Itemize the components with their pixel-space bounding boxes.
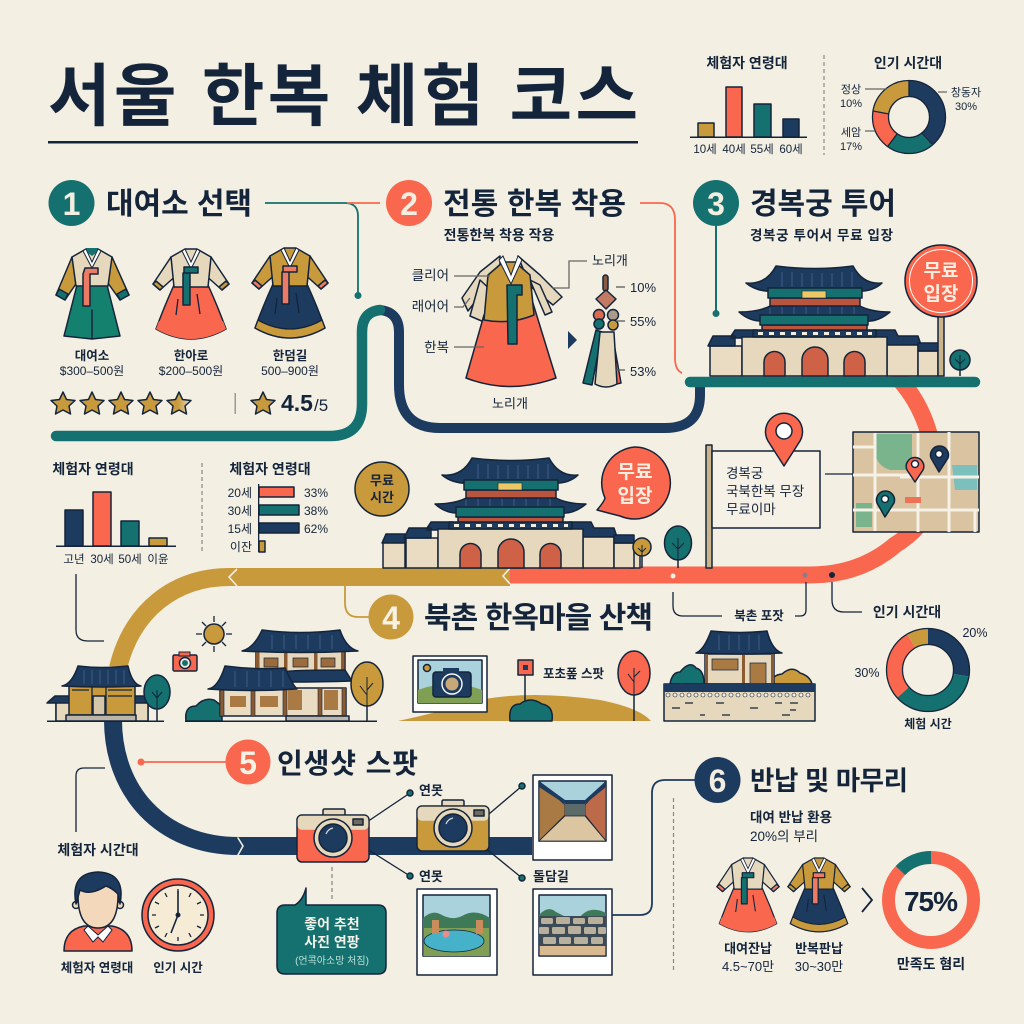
rating score: 4.5 [281, 390, 313, 416]
chart: top popular time donut: 인기 시간대 [874, 55, 942, 71]
hanok behind wall [664, 631, 815, 721]
badge: free time: 시간 [370, 490, 394, 505]
chart: age horizontal bars: 20세 [228, 486, 252, 500]
step 5 heading: 인생샷 스팟 [277, 748, 418, 779]
hanbok part labels: 래어어 [412, 299, 449, 314]
chart: satisfaction ring [888, 858, 974, 972]
chart: top age bars: 55세 [750, 143, 774, 156]
label: visitor time: 체험자 시간대 [57, 842, 139, 858]
chart: top popular time donut: 세암 [841, 126, 861, 139]
rating score: /5 [314, 396, 328, 415]
callout: photo recommendation: (언콕아소망 처짐) [295, 955, 369, 967]
badge: free time: 무료 [370, 473, 394, 488]
chart: age horizontal bars: 33% [304, 486, 328, 500]
large hanbok diagram [462, 256, 562, 386]
step 5 heading: 5 [239, 745, 257, 781]
step 2 heading [386, 180, 626, 243]
return labels [722, 941, 843, 974]
map: pin sign board: 경복궁 [726, 466, 763, 481]
chart: satisfaction ring: 만족도 혐리 [897, 956, 965, 972]
photo frame: camera [413, 656, 487, 712]
tree next to small hanok [144, 675, 170, 721]
hanbok 1: teal trousers [56, 248, 129, 339]
gold hill [398, 695, 651, 721]
hanbok part labels: 한복 [424, 340, 449, 355]
teal tree [664, 526, 692, 568]
chart: age bars left [52, 461, 176, 566]
connector 2 to palace [640, 203, 682, 373]
option labels: $300–500원 [60, 364, 124, 378]
photo spot sign [510, 660, 604, 721]
palace: middle [382, 458, 640, 568]
chart: top popular time donut: 창동자 [951, 86, 981, 99]
return labels: 4.5~70만 [722, 959, 774, 974]
label: bukchon photo: 북촌 포잣 [734, 609, 784, 623]
badge: free time [355, 462, 409, 516]
step 3 heading: 경복궁 투어 [750, 188, 896, 221]
photo: stone wall [533, 889, 612, 975]
icon: clock [142, 879, 214, 951]
norigae ornament [583, 275, 625, 387]
labels: person and clock [61, 960, 203, 975]
speech bubble: free admission: 무료 [618, 462, 652, 483]
chart: top age bars: 체험자 연령대 [706, 55, 788, 71]
chart: top popular time donut: 17% [840, 141, 862, 153]
sign: free admission [905, 245, 977, 376]
camera: coral [297, 809, 369, 862]
callout: photo recommendation [277, 888, 386, 974]
sign: free admission: 입장 [924, 283, 958, 305]
chart: top age bars: 60세 [779, 143, 803, 156]
small hanok [47, 666, 164, 722]
speech bubble: free admission [597, 447, 670, 519]
labels: person and clock: 인기 시간 [153, 960, 203, 975]
map [853, 432, 979, 532]
option labels [60, 348, 319, 378]
return labels: 반복판납 [795, 941, 843, 956]
chart: age horizontal bars [228, 461, 328, 554]
step 4 heading [345, 586, 653, 640]
speech bubble: free admission: 입장 [618, 485, 652, 507]
step 4 heading: 4 [382, 600, 400, 636]
step 5 heading [138, 740, 418, 784]
connector 1 to route [265, 203, 380, 299]
chart: age bars left: 체험자 연령대 [52, 461, 134, 477]
norigae percentages: 55% [630, 314, 656, 329]
chart: popular time donut: 체험 시간 [904, 716, 952, 731]
icon: sun [196, 616, 232, 652]
chart: top popular time donut: 10% [840, 98, 862, 110]
arrow: to norigae [568, 331, 577, 349]
step 1 heading [48, 180, 252, 226]
step 1 heading: 대여소 선택 [106, 188, 252, 221]
step 3 heading [693, 180, 896, 317]
norigae percentages: 53% [630, 364, 656, 379]
callout: photo recommendation: 좋어 추천 [304, 916, 360, 932]
connector: photos to step 6 [612, 780, 696, 915]
return labels: 30~30만 [795, 959, 843, 974]
step 4 heading: 북촌 한옥마을 산책 [424, 602, 653, 635]
tree [950, 350, 970, 376]
step 6 heading: 반납 및 마무리 [750, 766, 908, 796]
large hanok [185, 630, 377, 722]
labels: person and clock: 체험자 연령대 [61, 960, 133, 975]
connector: route to visitor time [76, 768, 105, 832]
chart: age bars left: 30세 [90, 553, 114, 566]
chart: age horizontal bars: 체험자 연령대 [229, 461, 311, 477]
map: pin sign board: 무료이마 [726, 502, 776, 517]
return labels: 대여잔납 [724, 941, 772, 956]
hanbok: rental coral [717, 858, 779, 932]
icon: small camera [173, 652, 197, 671]
arrow: chevron [862, 888, 872, 912]
chart: top age bars: 10세 [693, 143, 717, 156]
camera callouts: 돌담길 [533, 869, 569, 884]
norigae percentages: 10% [630, 280, 656, 295]
chart: age horizontal bars: 30세 [228, 504, 252, 518]
step 3 heading: 경복궁 투어서 무료 입장 [750, 228, 894, 243]
map: pin sign board: 국북한복 무장 [726, 484, 804, 499]
chart: age bars left: 고년 [63, 553, 85, 566]
chart: satisfaction ring: 75% [904, 886, 958, 917]
chart: top age bars [690, 55, 807, 156]
chart: popular time donut: 20% [962, 626, 988, 640]
hanbok: rental navy [788, 858, 850, 932]
callout: photo recommendation: 사진 연팡 [304, 934, 360, 950]
step 6 heading: 20%의 부리 [750, 829, 818, 844]
step 6 heading: 6 [709, 763, 726, 799]
step 2 heading: 2 [400, 186, 418, 222]
option labels: $200–500원 [159, 364, 223, 378]
chart: top age bars: 40세 [722, 143, 746, 156]
step 3 heading: 3 [707, 186, 725, 222]
chart: age bars left: 이윤 [147, 553, 169, 566]
chart: age bars left: 50세 [118, 553, 142, 566]
route path [56, 310, 975, 855]
camera: gold [417, 800, 489, 851]
hanbok part labels: 노리개 [592, 253, 628, 268]
step 1 heading: 1 [63, 186, 80, 222]
palace: top [708, 266, 938, 376]
photo: pond [417, 889, 497, 975]
small gold tree [633, 538, 651, 568]
chart: age horizontal bars: 이잔 [230, 540, 252, 554]
hanbok part labels [412, 253, 628, 411]
coral tree [618, 651, 650, 721]
hanbok part labels: 클리어 [412, 268, 449, 283]
map: pin sign board [706, 413, 820, 568]
option labels: 500–900원 [261, 364, 319, 378]
title: 서울 한복 체험 코스 [48, 59, 638, 135]
rating stars [51, 392, 275, 414]
chart: top popular time donut: 정상 [841, 83, 861, 96]
step 6 heading [694, 757, 908, 844]
camera callouts [356, 783, 569, 884]
gold tree [351, 662, 383, 721]
camera callouts: 연못 [419, 783, 443, 798]
sign: free admission: 무료 [924, 261, 958, 282]
step 2 heading: 전통 한복 착용 [443, 188, 626, 221]
option labels: 한아로 [174, 348, 208, 363]
step 2 heading: 전통한복 착용 작용 [444, 227, 555, 243]
chart: top popular time donut: 30% [955, 101, 977, 113]
chart: popular time donut: 인기 시간대 [873, 604, 941, 620]
connector markers on route [670, 572, 862, 616]
hanbok 2: coral skirt [153, 249, 229, 339]
chart: age horizontal bars: 62% [304, 522, 328, 536]
hanbok part labels: 노리개 [492, 396, 528, 411]
chart: popular time donut: 30% [854, 666, 880, 680]
norigae percentages [630, 280, 656, 379]
chart: age horizontal bars: 15세 [228, 522, 252, 536]
icon: person [64, 872, 132, 951]
chart: popular time donut [854, 604, 988, 731]
option labels: 한덤길 [273, 348, 307, 363]
camera callouts: 연못 [419, 869, 443, 884]
chart: age horizontal bars: 38% [304, 504, 328, 518]
rating score [281, 390, 328, 416]
option labels: 대여소 [75, 349, 109, 363]
chart: top popular time donut [840, 55, 981, 154]
photo spot sign: 포초퐆 스팟 [543, 667, 604, 681]
connector: age chart to house [76, 574, 104, 641]
hanbok 3: navy skirt [252, 248, 328, 338]
photo: alley [533, 775, 612, 860]
step 6 heading: 대여 반납 환용 [750, 810, 832, 825]
